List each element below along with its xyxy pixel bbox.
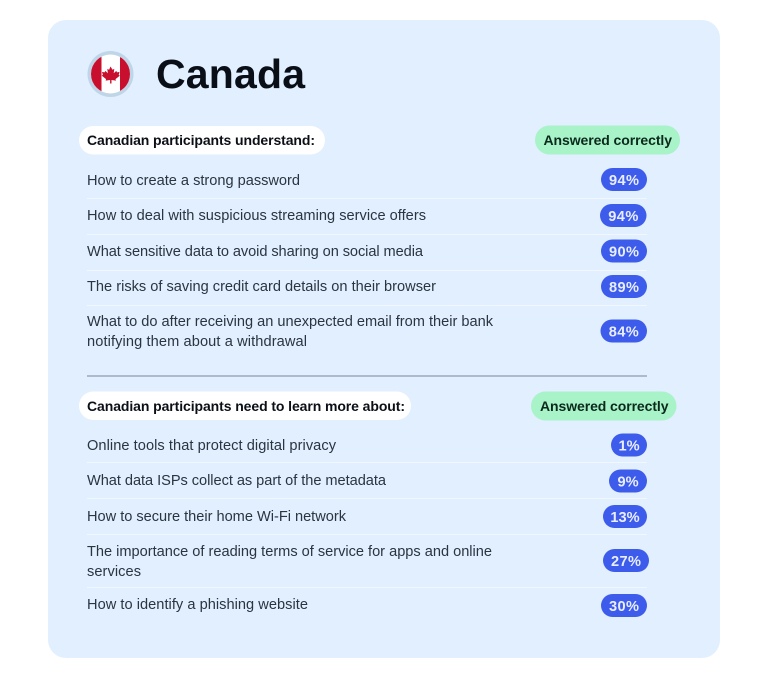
row: sensitive data — [87, 240, 647, 262]
row: unexpected bank email — [87, 314, 647, 350]
row: home Wi-Fi: How to secure their home Wi-Fi network — [87, 509, 347, 525]
row: unexpected bank email: 84% — [609, 324, 639, 340]
row: credit card details: The risks of saving credit card details on their browser — [87, 279, 436, 295]
heading: understand: Canadian participants understand: — [87, 132, 315, 148]
row: sensitive data: 90% — [609, 244, 639, 260]
icon: Canadian flag — [88, 51, 134, 97]
row: strong password: 94% — [609, 173, 639, 189]
row: privacy tools: 1% — [618, 438, 640, 454]
row: unexpected bank email: What to do after receiving an unexpected email from their bank — [87, 314, 494, 330]
row: privacy tools — [87, 434, 647, 456]
label: answered correctly: Answered correctly — [544, 132, 672, 148]
row: phishing website: 30% — [609, 599, 639, 615]
row: terms of service — [87, 544, 649, 580]
title: Canada — [156, 51, 306, 97]
heading: understand — [79, 126, 325, 154]
row: terms of service: services — [87, 564, 141, 580]
heading: need to learn more — [79, 392, 411, 420]
row: ISP metadata: What data ISPs collect as part of the metadata — [87, 473, 387, 489]
row: strong password — [87, 168, 647, 191]
row: streaming offers — [87, 204, 646, 227]
row: strong password: How to create a strong password — [87, 173, 300, 189]
label: answered correctly second — [531, 392, 676, 420]
row: sensitive data: What sensitive data to avoid sharing on social media — [87, 244, 424, 260]
row: ISP metadata: 9% — [617, 474, 639, 490]
row: streaming offers: How to deal with suspicious streaming service offers — [87, 208, 426, 224]
row: credit card details — [87, 275, 647, 298]
row: privacy tools: Online tools that protect digital privacy — [87, 438, 337, 454]
row: phishing website: How to identify a phishing website — [87, 597, 308, 613]
row: credit card details: 89% — [609, 280, 639, 296]
row: home Wi-Fi — [87, 505, 647, 528]
row: terms of service: 27% — [611, 554, 641, 570]
row: streaming offers: 94% — [608, 209, 638, 225]
row: phishing website — [87, 594, 647, 617]
label: answered correctly second: Answered correctly — [540, 398, 669, 414]
row: ISP metadata — [87, 470, 647, 492]
row: unexpected bank email: notifying them about a withdrawal — [87, 334, 307, 350]
heading: need to learn more: Canadian participants need to learn more about: — [87, 398, 405, 414]
row: home Wi-Fi: 13% — [610, 510, 640, 526]
label: answered correctly — [535, 126, 680, 154]
row: terms of service: The importance of reading terms of service for apps and online — [87, 544, 492, 560]
